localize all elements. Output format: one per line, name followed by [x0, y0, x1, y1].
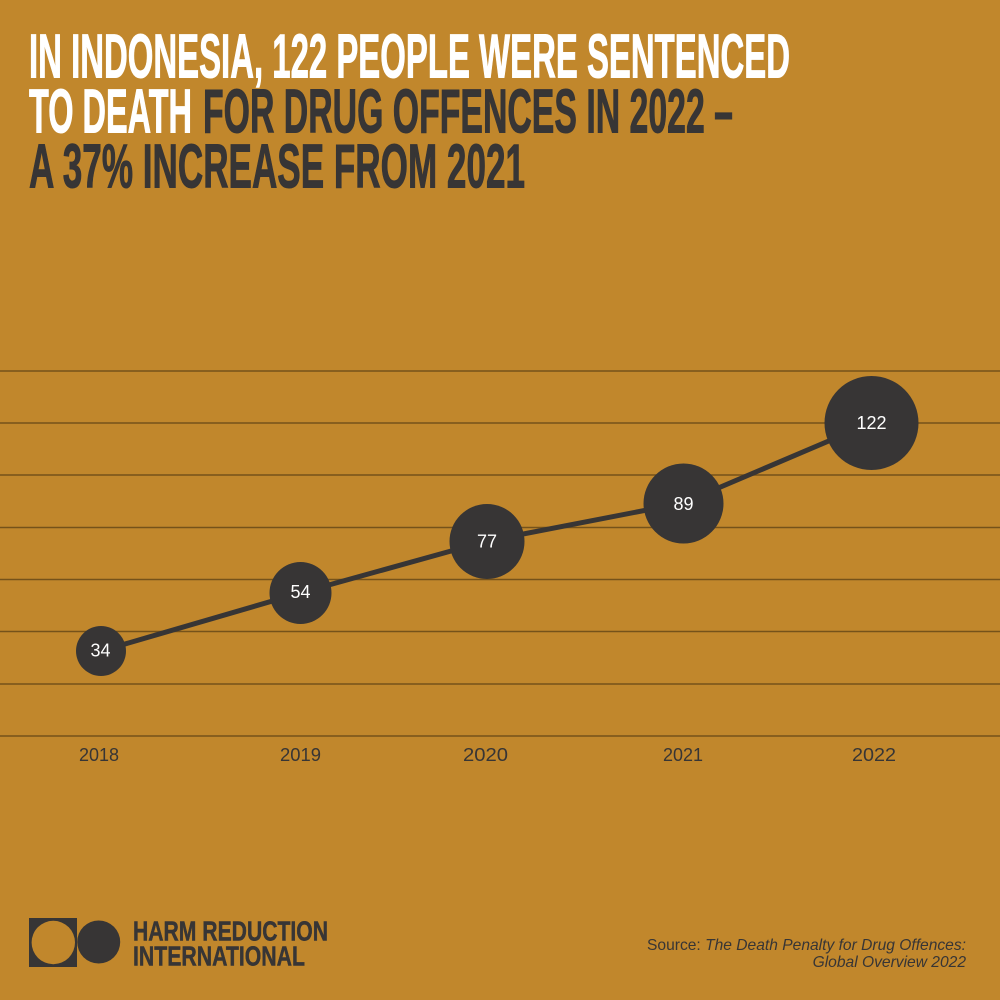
- data point 2018: [76, 626, 126, 676]
- data point 2020: 77: [477, 532, 497, 552]
- logo wordmark: HARM REDUCTION: [133, 916, 328, 946]
- source note: [647, 937, 966, 971]
- x-axis year labels: 2018: [79, 745, 119, 765]
- x-axis year labels: [79, 745, 896, 765]
- source note: Global Overview 2022: [813, 954, 966, 971]
- logo: Harm Reduction International: [29, 916, 328, 972]
- data point 2019: [270, 562, 332, 624]
- logo mark: [29, 918, 120, 967]
- logo wordmark: INTERNATIONAL: [133, 940, 305, 972]
- title: A 37% INCREASE FROM 2021: [29, 132, 525, 202]
- title: [29, 22, 790, 202]
- data point 2019: 54: [290, 582, 311, 602]
- logo wordmark: [133, 916, 328, 972]
- x-axis year labels: 2021: [663, 745, 703, 765]
- line chart: sentences per year: [76, 376, 918, 676]
- data point 2022: [824, 376, 918, 470]
- title: TO DEATH: [29, 78, 192, 146]
- data point 2022: 122: [856, 413, 887, 433]
- data point 2018: 34: [90, 640, 111, 660]
- x-axis year labels: 2019: [280, 745, 321, 765]
- data point 2021: [644, 464, 724, 544]
- data point 2021: 89: [673, 494, 694, 514]
- trend line: [101, 423, 871, 651]
- source note: Source: The Death Penalty for Drug Offences:: [647, 937, 966, 954]
- x-axis year labels: 2020: [463, 745, 508, 765]
- x-axis year labels: 2022: [852, 745, 896, 765]
- data point 2020: [450, 504, 524, 579]
